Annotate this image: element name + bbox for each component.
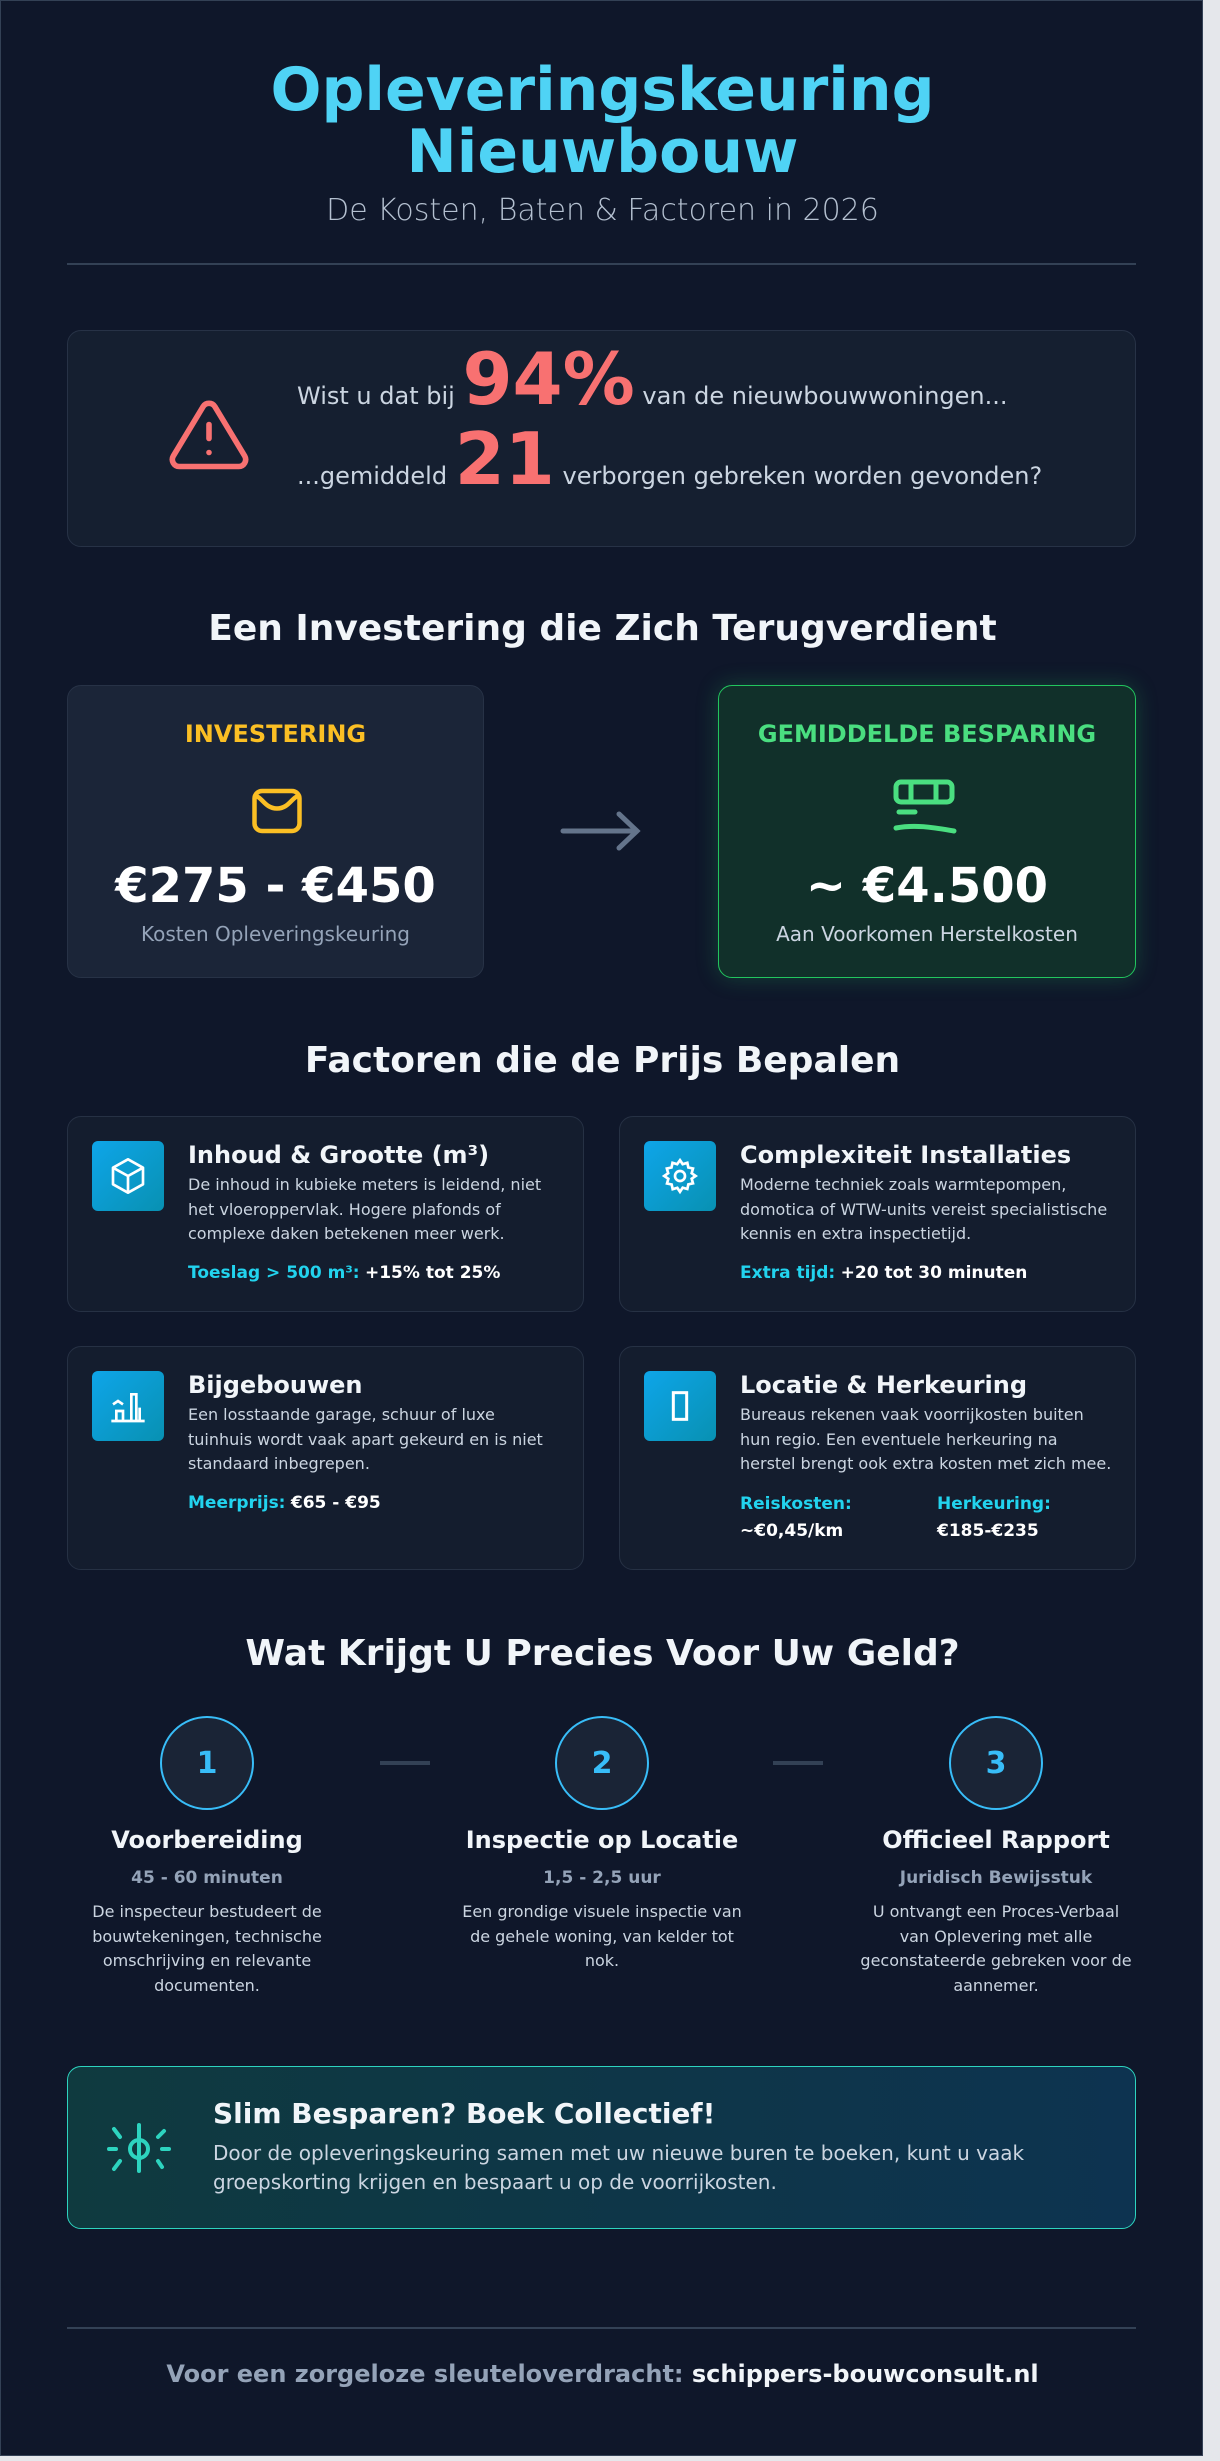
panel: locatie: €185-€235	[937, 1520, 1039, 1540]
stat callout	[67, 330, 1136, 547]
panel: besparing: ~ €4.500	[806, 858, 1048, 914]
panel: complexiteit	[619, 1116, 1136, 1312]
panel: complexiteit: Complexiteit Installaties	[740, 1141, 1071, 1169]
step 3: Officieel Rapport	[882, 1826, 1110, 1854]
step 3: U ontvangt een Proces-Verbaal van Oplevering met alle geconstateerde gebreken voor de aannemer.	[860, 1902, 1132, 1994]
title: Nieuwbouw	[407, 117, 798, 187]
heading: investering: Een Investering die Zich Terugverdient	[208, 608, 997, 649]
panel: inhoud: De inhoud in kubieke meters is leidend, niet het vloeroppervlak. Hogere plafonds of complexe daken betekenen meer werk.	[188, 1175, 541, 1243]
icon: cube	[92, 1141, 164, 1211]
icon: gear	[644, 1141, 716, 1211]
panel: bijgebouwen	[67, 1346, 584, 1570]
panel: bijgebouwen: Meerprijs: €65 - €95	[188, 1492, 381, 1512]
step 2: 2	[592, 1746, 612, 1780]
step 2: Inspectie op Locatie	[466, 1826, 738, 1854]
footer: Voor een zorgeloze sleuteloverdracht: schippers-bouwconsult.nl	[166, 2360, 1039, 2388]
panel: locatie	[619, 1346, 1136, 1570]
panel: bijgebouwen: Een losstaande garage, schuur of luxe tuinhuis wordt vaak apart gekeurd en is niet standaard inbegrepen.	[188, 1405, 543, 1473]
step 3: 3	[986, 1746, 1006, 1780]
step 2: Een grondige visuele inspectie van de gehele woning, van kelder tot nok.	[462, 1902, 742, 1970]
step 3: Juridisch Bewijsstuk	[900, 1868, 1092, 1888]
step 2: 1,5 - 2,5 uur	[543, 1868, 661, 1888]
icon: buildings	[92, 1371, 164, 1441]
panel: besparing: GEMIDDELDE BESPARING	[758, 720, 1096, 748]
title	[270, 55, 935, 187]
arrow	[560, 812, 640, 850]
step 2	[462, 1716, 742, 1970]
step 1: 1	[197, 1746, 217, 1780]
panel: complexiteit: Moderne techniek zoals warmtepompen, domotica of WTW-units vereist specialistische kennis en extra inspectietijd.	[740, 1175, 1107, 1243]
panel: besparing	[718, 685, 1136, 978]
panel: inhoud	[67, 1116, 584, 1312]
subtitle: De Kosten, Baten & Factoren in 2026	[326, 193, 879, 228]
callout: collectief boeken	[67, 2066, 1136, 2229]
panel: locatie: Locatie & Herkeuring	[740, 1371, 1027, 1399]
title: Opleveringskeuring	[270, 55, 935, 125]
panel: locatie: Herkeuring:	[937, 1494, 1051, 1514]
icon: wallet	[252, 788, 302, 834]
panel: bijgebouwen: Bijgebouwen	[188, 1371, 362, 1399]
step 1: 45 - 60 minuten	[131, 1868, 283, 1888]
panel: investering: €275 - €450	[115, 858, 436, 914]
step 3	[860, 1716, 1132, 1994]
panel: inhoud: Toeslag > 500 m³: +15% tot 25%	[188, 1262, 500, 1282]
panel: investering	[67, 685, 484, 978]
callout: collectief boeken: Door de opleveringskeuring samen met uw nieuwe buren te boeken, kunt u vaak groepskorting krijgen en bespaart u op de voorrijkosten.	[213, 2141, 1024, 2194]
panel: locatie: ~€0,45/km	[740, 1520, 843, 1540]
heading: factoren: Factoren die de Prijs Bepalen	[305, 1040, 900, 1081]
icon: money	[894, 780, 956, 834]
icon: savings	[107, 2123, 171, 2173]
panel: locatie: Bureaus rekenen vaak voorrijkosten buiten hun regio. Een eventuele herkeuring na herstel brengt ook extra kosten met zich mee.	[740, 1405, 1111, 1473]
callout: collectief boeken: Slim Besparen? Boek Collectief!	[213, 2097, 715, 2130]
connectors	[380, 1761, 430, 1765]
panel: investering: INVESTERING	[185, 720, 366, 748]
step 1: Voorbereiding	[111, 1826, 303, 1854]
step 1: De inspecteur bestudeert de bouwtekeningen, technische omschrijving en relevante documenten.	[92, 1902, 322, 1994]
icon: door	[644, 1371, 716, 1441]
panel: investering: Kosten Opleveringskeuring	[141, 922, 410, 946]
panel: complexiteit: Extra tijd: +20 tot 30 minuten	[740, 1262, 1027, 1282]
panel: inhoud: Inhoud & Grootte (m³)	[188, 1141, 489, 1169]
stat line 2: ...gemiddeld 21 verborgen gebreken worden gevonden?	[297, 417, 1042, 501]
heading: wat krijgt u: Wat Krijgt U Precies Voor Uw Geld?	[245, 1633, 960, 1674]
icon: warning	[170, 400, 248, 470]
panel: locatie: Reiskosten:	[740, 1494, 852, 1514]
stat line 1: Wist u dat bij 94% van de nieuwbouwwoningen...	[297, 337, 1008, 421]
panel: besparing: Aan Voorkomen Herstelkosten	[776, 922, 1078, 946]
step 1	[92, 1716, 322, 1994]
